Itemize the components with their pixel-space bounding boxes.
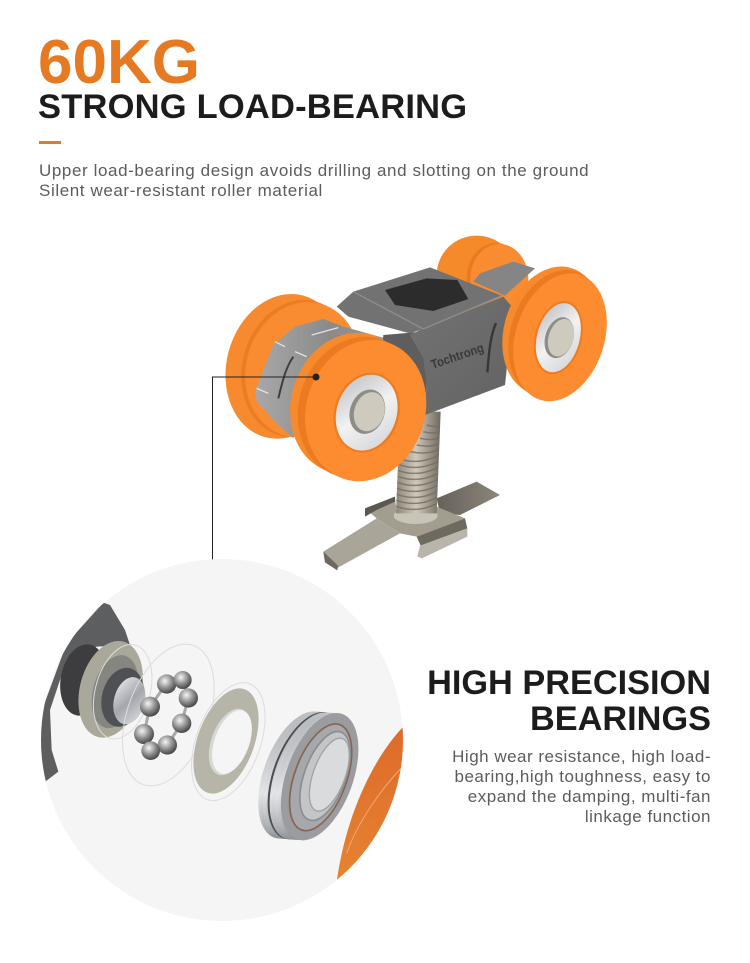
right wing of base [437, 482, 500, 515]
right hub washer [526, 296, 591, 380]
dark housing [37, 603, 130, 783]
centre of base plate [365, 497, 465, 537]
hexagon hole [385, 278, 468, 311]
left orange flanges [210, 281, 375, 452]
detail circle [37, 559, 430, 923]
bearings description: High wear resistance, high load- [452, 747, 711, 766]
bolt flange ring [394, 507, 438, 524]
inner washer face [92, 655, 138, 728]
brand mark: Tochtrong [429, 341, 486, 372]
accent dash [39, 141, 61, 144]
right hub cap [543, 315, 579, 360]
inner washer [78, 641, 143, 738]
heading: high precision bearings [427, 664, 711, 738]
ball chain [134, 671, 198, 760]
lower tab of base [417, 528, 467, 558]
bearings description: linkage function [585, 807, 711, 826]
front strip of base [417, 518, 467, 546]
right orange roller [486, 254, 622, 413]
leader line [212, 377, 316, 560]
shaft [101, 668, 144, 727]
threaded bolt and base plate [323, 412, 500, 570]
front hub washer [323, 364, 410, 461]
bearings description [452, 747, 711, 826]
bearings description: expand the damping, multi-fan [468, 787, 711, 806]
upper corner shadow [365, 497, 395, 517]
heading: high precision bearings: BEARINGS [530, 700, 711, 738]
description text: Silent wear-resistant roller material [39, 181, 323, 200]
left axle housing [255, 319, 392, 438]
description text [39, 161, 589, 200]
outer race [258, 711, 358, 840]
dark body [337, 267, 513, 425]
description text: Upper load-bearing design avoids drilling and slotting on the ground [39, 161, 589, 180]
thin outlines [92, 644, 266, 801]
bolt shaft [396, 412, 441, 513]
subtitle: strong load-bearing: STRONG LOAD-BEARING [38, 88, 467, 126]
product: roller hanger [210, 236, 622, 570]
side groove [487, 323, 496, 372]
bearings description: bearing,high toughness, easy to [454, 767, 711, 786]
shaft cap [113, 677, 146, 724]
housing bore [60, 644, 99, 716]
heading: high precision bearings: HIGH PRECISION [427, 664, 711, 702]
back orange roller [437, 236, 528, 314]
back axle housing [473, 262, 535, 296]
left wing of base [323, 518, 400, 568]
main title: 60KG: 60KG [38, 28, 200, 97]
thin washer [193, 688, 259, 794]
front orange roller [272, 317, 444, 497]
leader dot [312, 374, 320, 380]
front hub cap [349, 388, 390, 435]
orange roller edge [336, 728, 403, 880]
